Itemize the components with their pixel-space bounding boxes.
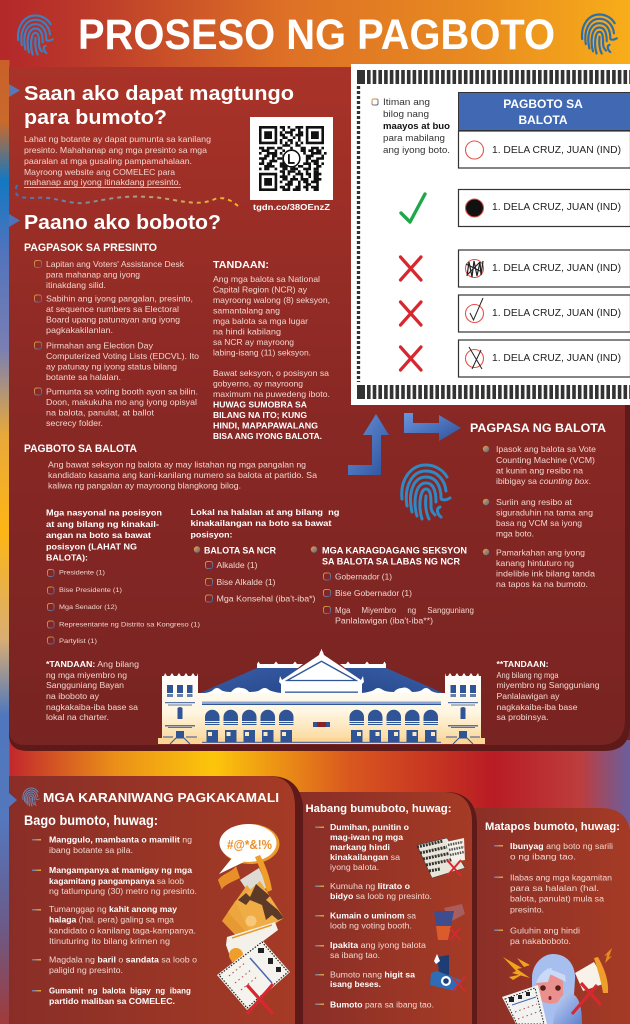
subheading: Bago bumoto, huwag:: [24, 813, 158, 828]
instruction text: Itiman ang: [383, 97, 430, 107]
list: kagamitang pangampanya sa loob: [49, 877, 185, 886]
list: Bumoto para sa ibang tao.: [330, 1000, 434, 1010]
local positions: Panlalawigan (iba't-iba**): [335, 616, 433, 626]
ballot row: correct: 1. DELA CRUZ, JUAN (IND): [492, 202, 621, 213]
text block: ballot description: kandidato kasama ang kani-kanilang numero sa balota at partido. Sa: [48, 471, 317, 480]
list: halaga (hal. pera) galing sa mga: [49, 916, 175, 924]
ballot row: cross mark: [458, 340, 630, 377]
illustration: speech bubble with symbols: #@*&!%: [227, 838, 272, 852]
list: passing steps: Suriin ang resibo at: [496, 498, 573, 507]
icon: fingerprint centre: [402, 465, 450, 519]
local positions: posisyon:: [190, 530, 232, 540]
dashed route line: [16, 185, 238, 206]
local positions: Mga Miyembro ng Sangguniang: [335, 606, 474, 615]
callout: tandaan: mga balota sa mga lugar: [213, 317, 308, 326]
local positions: Lokal na halalan at ang bilang ng: [190, 508, 340, 517]
instruction text: ang iyong boto.: [383, 145, 450, 155]
arrow: right: [404, 413, 461, 441]
list: passing steps: Pamarkahan ang iyong: [496, 548, 585, 558]
callout: tandaan: mayroong walong (8) seksyon,: [213, 296, 330, 305]
illustration: cup: [434, 904, 465, 940]
heading: where to go: para bumoto?: [24, 107, 167, 129]
list: Mangampanya at mamigay ng mga: [49, 866, 193, 875]
list: entering steps: Board upang patunayan ang iyong: [46, 316, 180, 324]
callout: tandaan: HINDI, MAPAPAWALANG: [213, 422, 318, 430]
text block: precinct intro: Mayroong website ang COMELEC para: [24, 167, 175, 177]
national positions: BALOTA):: [46, 554, 88, 562]
panel: main red panel: [9, 67, 630, 751]
text block: ballot description: Ang bawat seksyon ng balota ay may listahan ng mga pangalan ng: [48, 460, 306, 470]
local positions: SA BALOTA SA LABAS NG NCR: [322, 556, 460, 566]
list: bidyo sa loob ng presinto.: [330, 892, 432, 901]
list: entering steps: ay patunay ng iyong status bilang: [46, 362, 177, 372]
ballot row: cross mark: 1. DELA CRUZ, JUAN (IND): [492, 353, 621, 364]
list: Ilabas ang mga kagamitan: [510, 874, 612, 882]
callout: tandaan: maximum na puwedeng iboto.: [213, 390, 330, 399]
list: Ipakita ang iyong balota: [330, 941, 427, 950]
heading: Matapos bumoto, huwag:: [485, 821, 620, 833]
left colour strip: [0, 60, 10, 1024]
national positions: Mga nasyonal na posisyon: [46, 508, 162, 518]
ballot row: empty: 1. DELA CRUZ, JUAN (IND): [492, 145, 621, 156]
note: right: Ang bilang ng mga: [496, 671, 559, 680]
list: para sa halalan (hal.: [510, 884, 599, 893]
list: entering steps: Lapitan ang Voters' Assistance Desk: [46, 260, 185, 269]
callout: tandaan: samantalang ang: [213, 306, 280, 316]
icon: red X 2: [400, 302, 421, 325]
list: presinto.: [510, 906, 544, 914]
icon: fingerprint small: [23, 788, 39, 806]
note: left: nagkakaiba-iba base sa: [46, 703, 139, 712]
note: left: [46, 660, 139, 722]
national positions: Mga Senador (12): [59, 604, 117, 611]
ballot header: [458, 92, 630, 130]
callout: tandaan: HUWAG SUMOBRA SA: [213, 400, 307, 410]
note: left: Sangguniang Bayan: [46, 681, 124, 690]
list: passing steps: na tapos ka na bumoto.: [496, 580, 588, 589]
icon: fingerprint right: [582, 14, 617, 54]
ballot row: empty: [458, 131, 630, 168]
text block: precinct intro: mahanap ang iyong itinakdang presinto.: [24, 177, 181, 187]
text block: precinct intro: Lahat ng botante ay dapat pumunta sa kanilang: [24, 134, 211, 144]
illustration: envelope: [226, 922, 278, 962]
list: Manggulo, mambanta o mamilit ng: [49, 836, 192, 844]
text block: precinct intro: [24, 134, 211, 188]
list: o ng ibang tao.: [510, 852, 576, 862]
list: entering steps: at sequence numbers sa Electoral: [46, 305, 179, 314]
illustration: speech bubble with symbols: [218, 824, 280, 890]
list: entering steps: secrecy folder.: [46, 419, 103, 428]
subheading: entering the precinct: PAGPASOK SA PRESINTO: [24, 242, 157, 254]
panel: after voting: [465, 808, 630, 1024]
heading: where to go: Saan ako dapat magtungo: [24, 83, 294, 105]
list: Tumanggap ng kahit anong may: [49, 905, 178, 914]
list: Magdala ng baril o sandata sa loob o: [49, 956, 198, 964]
list: passing steps: Counting Machine (VCM): [496, 456, 595, 465]
national positions: Presidente (1): [59, 570, 105, 576]
note: right: nagkakaiba-iba base: [496, 703, 578, 712]
list: ng tatlumpung (30) metro ng presinto.: [49, 887, 197, 896]
note: right: [496, 660, 600, 722]
ballot row: check mark: [458, 295, 630, 332]
callout: tandaan: na hindi kabilang: [213, 328, 281, 336]
local positions: MGA KARAGDAGANG SEKSYON: [322, 546, 467, 556]
list: passing steps: [483, 445, 596, 589]
national positions: angan na boto sa bawat: [46, 531, 151, 540]
national positions: Partylist (1): [59, 638, 97, 645]
illustration: ballot with X: [217, 940, 290, 1014]
list: entering steps: [34, 260, 199, 428]
local positions: kinakailangan na boto sa bawat: [190, 519, 332, 528]
arrow: up: [348, 414, 389, 475]
national positions: [46, 508, 200, 645]
callout: tandaan: BISA ANG IYONG BALOTA.: [213, 432, 322, 441]
local positions: Bise Alkalde (1): [216, 578, 276, 587]
text block: ballot description: kaliwa ng pangalan ay mayroong blangkong bilog.: [48, 482, 241, 490]
note: right: miyembro ng Sangguniang: [496, 681, 600, 690]
instruction text: para mabilang: [383, 133, 445, 143]
list: entering steps: botante sa halalan.: [46, 373, 121, 382]
callout: tandaan: Ang mga balota sa National: [213, 275, 320, 284]
local positions: BALOTA SA NCR: [204, 546, 276, 556]
list: partido maliban sa COMELEC.: [49, 997, 175, 1006]
ballot header: PAGBOTO SA: [503, 97, 583, 111]
list: ibang botante sa pila.: [49, 846, 133, 855]
list: markang hindi: [330, 843, 390, 852]
subheading: voting on the ballot: PAGBOTO SA BALOTA: [24, 443, 137, 455]
header band: [0, 0, 630, 70]
icon: red X 1: [400, 257, 421, 280]
list: iyong balota.: [330, 863, 379, 872]
national positions: posisyon (LAHAT NG: [46, 542, 137, 552]
list: Guluhin ang hindi: [510, 926, 580, 936]
list: paligid ng presinto.: [49, 966, 123, 975]
illustration: voter with megaphone: [502, 948, 612, 1024]
instruction text: maayos at buo: [383, 121, 451, 131]
QR code: [250, 117, 333, 200]
colour band below main panel: [9, 740, 630, 830]
list: isang beses.: [330, 980, 381, 989]
list: entering steps: Sabihin ang iyong pangalan, presinto,: [46, 294, 193, 304]
heading: MGA KARANIWANG PAGKAKAMALI: [43, 791, 279, 805]
list: kinakailangan sa: [330, 853, 401, 862]
list: passing steps: ibibigay sa counting box .: [496, 477, 591, 486]
note: left: na iboboto ay: [46, 692, 99, 701]
instruction text: bilog nang: [383, 109, 429, 119]
illustration: camera: [430, 954, 465, 991]
list: passing steps: basa ng VCM sa iyong: [496, 519, 582, 528]
panel: ballot examples: [351, 64, 630, 405]
list: entering steps: pagkakakilanlan.: [46, 326, 113, 335]
list: loob ng voting booth.: [330, 922, 412, 930]
local positions: Gobernador (1): [335, 572, 392, 582]
text block: precinct intro: paaralan at mga gusaling pampamahalaan.: [24, 156, 192, 166]
callout: tandaan: [213, 259, 330, 441]
local positions: Mga Konsehal (iba't-iba*): [216, 594, 316, 604]
icon: fingerprint left: [18, 16, 53, 54]
note: right: **TANDAAN:: [496, 660, 548, 669]
ballot header: BALOTA: [518, 113, 568, 127]
list: Dumihan, punitin o: [330, 823, 409, 832]
heading: how to vote: Paano ako boboto?: [24, 212, 221, 234]
list: passing steps: indelible ink bilang tanda: [496, 570, 595, 578]
list: passing steps: at kunin ang resibo na: [496, 466, 583, 476]
text block: precinct intro: presinto. Mahahanap ang mga presinto sa mga: [24, 145, 207, 155]
ballot row: scribbled: 1. DELA CRUZ, JUAN (IND): [492, 263, 621, 274]
list: sa ibang tao.: [330, 951, 380, 960]
callout: tandaan: gobyerno, ay mayroong: [213, 380, 303, 388]
list: entering steps: Doon, makukuha mo ang iyong opisyal: [46, 398, 197, 407]
note: left: *TANDAAN: Ang bilang: [46, 660, 139, 669]
callout: tandaan: TANDAAN:: [213, 259, 269, 271]
list: [494, 842, 613, 946]
list: entering steps: na balota, panulat, at ballot: [46, 408, 155, 418]
note: right: sa probinsya.: [496, 713, 548, 722]
note: right: Panlalawigan ay: [496, 692, 560, 701]
list: entering steps: Pumunta sa voting booth ayon sa bilin.: [46, 388, 198, 396]
list: Gumamit ng balota bigay ng ibang: [49, 986, 191, 996]
heading: passing the ballot: PAGPASA NG BALOTA: [470, 421, 606, 435]
list: entering steps: Pirmahan ang Election Day: [46, 342, 154, 350]
illustration: torn ballots: [417, 838, 465, 878]
panel: common mistakes: [9, 776, 303, 1024]
instruction text: [372, 97, 451, 155]
illustration: megaphone and money: [222, 855, 284, 940]
callout: tandaan: Capital Region (NCR) ay: [213, 286, 308, 294]
list: entering steps: Computerized Voting Lists (EDCVL). Ito: [46, 352, 199, 361]
icon: red X 3: [400, 347, 421, 370]
list: kandidato o kanilang taga-kampanya.: [49, 926, 196, 936]
illustration: capitol building: [158, 649, 485, 744]
local positions: Alkalde (1): [216, 561, 258, 570]
local positions: Bise Gobernador (1): [335, 589, 412, 598]
national positions: Bise Presidente (1): [59, 587, 122, 594]
list: entering steps: para mahanap ang iyong: [46, 270, 140, 280]
text block: ballot description: [48, 460, 317, 490]
list: [315, 823, 434, 1010]
QR link: tgdn.co/38OEnzZ: [253, 202, 330, 212]
list: passing steps: kanang hintuturo ng: [496, 559, 574, 568]
ballot row: check mark: 1. DELA CRUZ, JUAN (IND): [492, 308, 621, 319]
list: [32, 836, 198, 1006]
local positions: [190, 508, 474, 626]
heading: where to go: [24, 83, 294, 129]
ballot row: scribbled: [458, 250, 630, 287]
list: Kumain o uminom sa: [330, 912, 417, 920]
callout: tandaan: Bawat seksyon, o posisyon sa: [213, 369, 329, 378]
list: pa nakaboboto.: [510, 937, 571, 946]
note: left: ng mga miyembro ng: [46, 671, 127, 680]
panel: while voting: [295, 792, 477, 1024]
list: Ibunyag ang boto ng sarili: [510, 842, 613, 851]
list: passing steps: mga boto.: [496, 530, 534, 538]
callout: tandaan: BILANG NA ITO; KUNG: [213, 411, 307, 420]
callout: tandaan: sa NCR ay mayroong: [213, 338, 294, 347]
list: balota, panulat) mula sa: [510, 894, 605, 904]
list: entering steps: itinakdang silid.: [46, 281, 106, 290]
list: passing steps: Ipasok ang balota sa Vote: [496, 445, 596, 454]
ballot row: correct: [458, 190, 630, 226]
list: passing steps: siguraduhin na tama ang: [496, 508, 593, 518]
national positions: at ang bilang ng kinakail-: [46, 520, 159, 529]
heading: Habang bumuboto, huwag:: [306, 803, 452, 815]
title: PROSESO NG PAGBOTO: [78, 11, 555, 59]
list: Kumuha ng litrato o: [330, 882, 410, 891]
icon: green check: [401, 194, 425, 222]
list: Itinuturing ito bilang krimen ng: [49, 937, 170, 946]
note: left: lokal na charter.: [46, 713, 109, 722]
list: Bumoto nang higit sa: [330, 970, 416, 980]
national positions: Representante ng Distrito sa Kongreso (1): [59, 622, 200, 628]
callout: tandaan: labing-isang (11) seksyon.: [213, 348, 311, 358]
list: mag-iwan ng mga: [330, 833, 404, 842]
